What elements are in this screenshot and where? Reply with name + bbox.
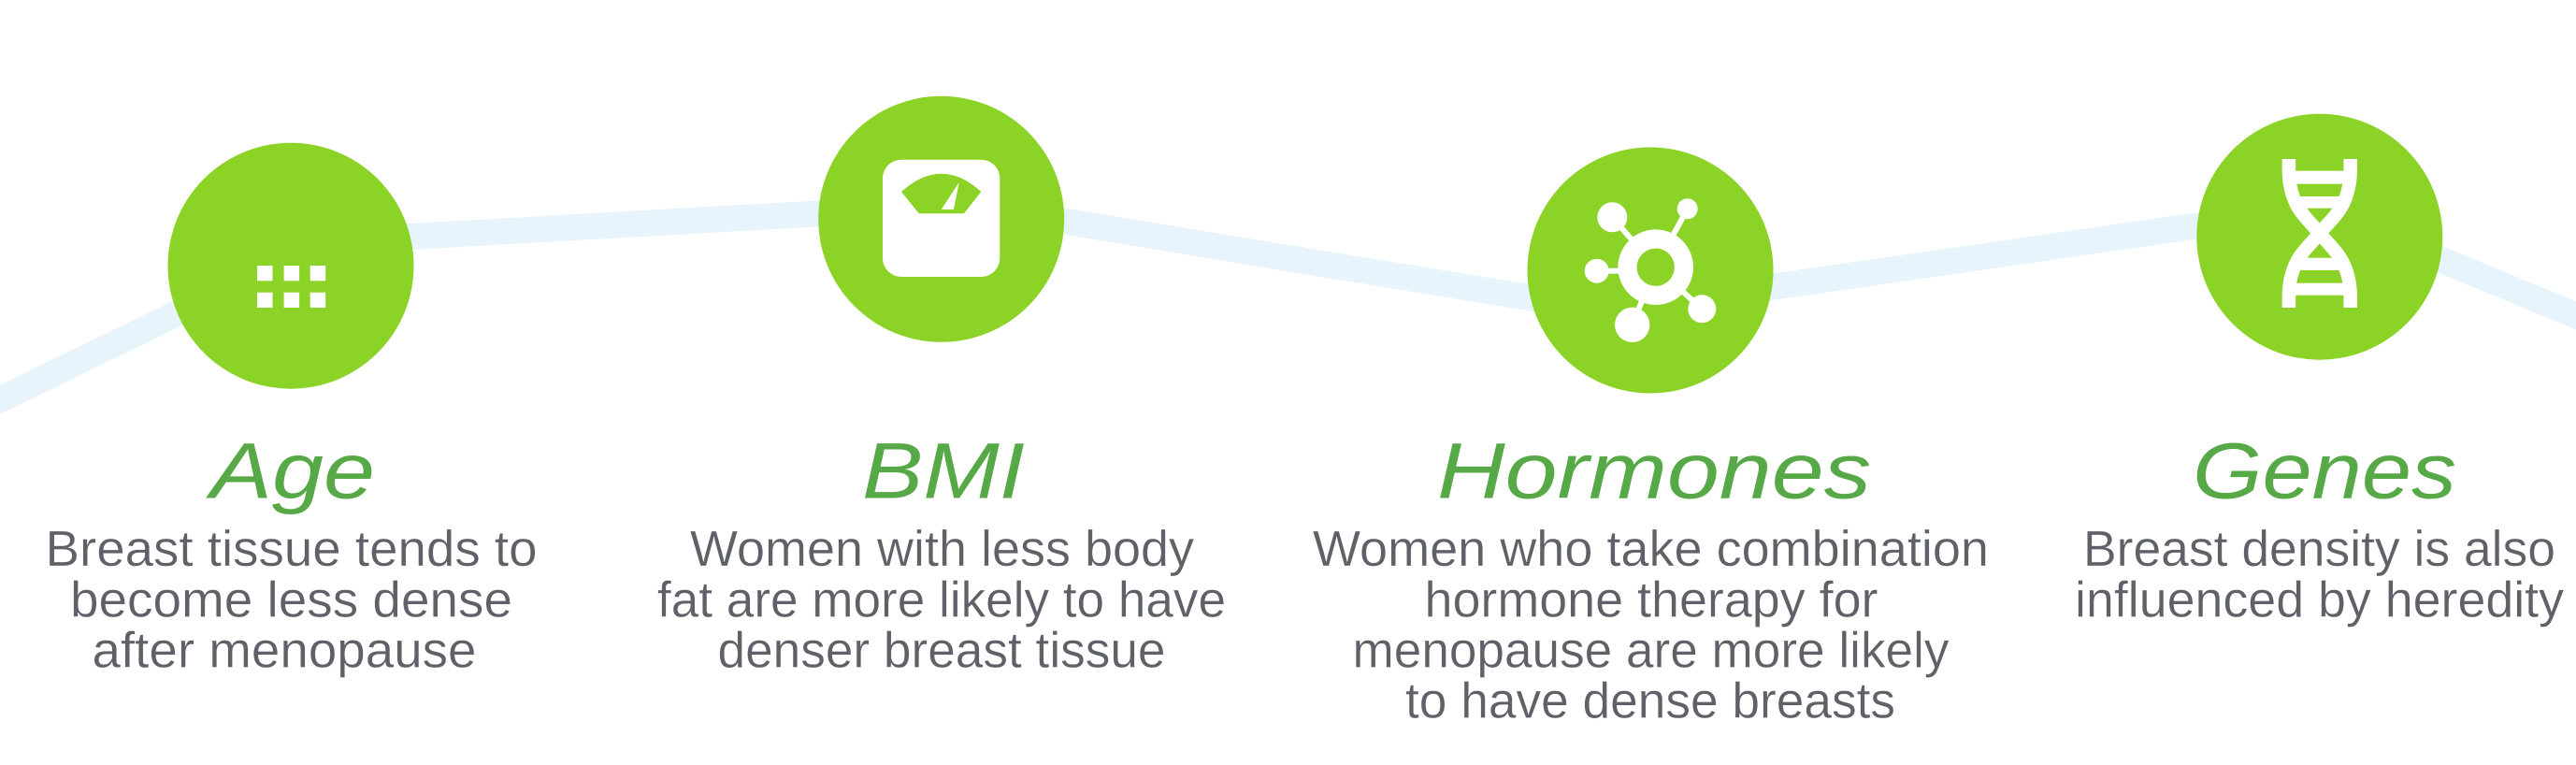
panel: age	[45, 143, 537, 678]
text block: BMI description: fat are more likely to have	[657, 571, 1226, 628]
panel: genes	[2075, 114, 2564, 628]
text block: hormones description: to have dense breasts	[1405, 672, 1895, 729]
text block: hormones description: hormone therapy for	[1425, 571, 1878, 628]
text block: BMI description: Women with less body	[690, 521, 1194, 577]
icon: age circle with dots	[168, 143, 413, 389]
text block: age description: become less dense	[70, 571, 512, 628]
text block: age description	[45, 521, 537, 678]
connecting line	[0, 201, 2576, 404]
text block: BMI description: denser breast tissue	[718, 622, 1165, 678]
heading: Age: Age	[205, 427, 375, 515]
text block: BMI description	[657, 521, 1226, 678]
icon: DNA helix	[2196, 114, 2442, 360]
icon: weighing scale	[818, 96, 1064, 342]
text block: hormones description: menopause are more likely	[1352, 622, 1949, 678]
panel: hormones	[1313, 148, 1989, 729]
text block: genes description: Breast density is also	[2083, 521, 2555, 577]
text block: genes description: influenced by heredity	[2075, 571, 2564, 628]
icon: hormone molecule	[1528, 148, 1773, 393]
text block: age description: after menopause	[92, 622, 477, 678]
heading: Genes: Genes	[2193, 427, 2456, 515]
heading: BMI: BMI	[862, 427, 1025, 515]
text block: hormones description	[1313, 521, 1989, 729]
text block: hormones description: Women who take combination	[1313, 521, 1989, 577]
heading: Hormones: Hormones	[1437, 427, 1871, 515]
text block: genes description	[2075, 521, 2564, 628]
panel: BMI	[657, 96, 1226, 678]
text block: age description: Breast tissue tends to	[45, 521, 537, 577]
